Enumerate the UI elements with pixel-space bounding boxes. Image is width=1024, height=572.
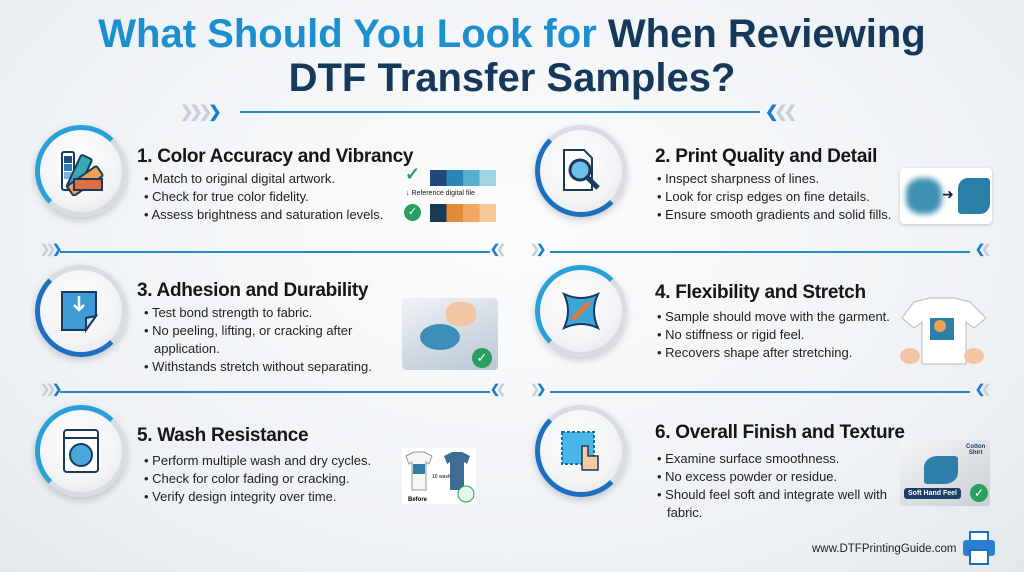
bullets bbox=[144, 305, 372, 374]
panel: adhesion bbox=[32, 265, 498, 374]
bullets: Verify design integrity over time. bbox=[152, 489, 336, 504]
row divider 1 bbox=[40, 242, 990, 256]
heading: 3. Adhesion and Durability bbox=[137, 280, 368, 301]
bullets bbox=[144, 171, 383, 222]
image: soft hand feel bbox=[900, 440, 990, 506]
bullets: Ensure smooth gradients and solid fills. bbox=[665, 207, 891, 222]
bullets: Check for true color fidelity. bbox=[152, 189, 309, 204]
bullets: Match to original digital artwork. bbox=[152, 171, 335, 186]
row divider 2: ❯❯❯ bbox=[40, 382, 58, 396]
image: peel test: ✓ bbox=[477, 350, 487, 365]
top divider: ❯❯❯❯ bbox=[180, 104, 218, 121]
image: before/after: Before bbox=[408, 497, 428, 503]
panel: flexibility bbox=[532, 265, 986, 364]
bullets: Check for color fading or cracking. bbox=[152, 471, 349, 486]
bullets: Assess brightness and saturation levels. bbox=[151, 207, 383, 222]
bullets: Withstands stretch without separating. bbox=[152, 359, 372, 374]
panel: finish and texture bbox=[532, 405, 990, 520]
title: What Should You Look for When Reviewing bbox=[98, 12, 926, 56]
panel: print quality bbox=[532, 125, 994, 226]
bullets: Should feel soft and integrate well with fabric. bbox=[665, 487, 887, 520]
bullets bbox=[144, 453, 371, 504]
row divider 2: ❯❯ bbox=[530, 382, 542, 396]
top divider bbox=[180, 104, 796, 122]
image: before/after bbox=[402, 448, 476, 504]
image: before/after: 10 wash bbox=[432, 474, 451, 480]
title: DTF Transfer Samples? bbox=[289, 56, 735, 100]
icon: washer bbox=[35, 405, 127, 497]
bullets bbox=[658, 309, 890, 360]
panel: wash resistance bbox=[32, 405, 476, 504]
bullets: Inspect sharpness of lines. bbox=[665, 171, 819, 186]
row divider 1: ❯❯❯ bbox=[40, 242, 58, 256]
row divider 1: ❮❮ bbox=[490, 242, 502, 256]
image: soft hand feel: Cotton bbox=[966, 444, 985, 450]
bullets: Perform multiple wash and dry cycles. bbox=[152, 453, 371, 468]
bullets: Look for crisp edges on fine details. bbox=[665, 189, 870, 204]
bullets: No peeling, lifting, or cracking after application. bbox=[152, 323, 352, 356]
image: blur vs sharp: ➜ bbox=[942, 186, 954, 202]
icon: magnifier bbox=[535, 125, 627, 217]
icon: peel bbox=[35, 265, 127, 357]
row divider 2: ❮❮ bbox=[490, 382, 502, 396]
heading: 1. Color Accuracy and Vibrancy bbox=[137, 146, 413, 167]
row divider 2 bbox=[40, 382, 990, 396]
row divider 2: ❮❮ bbox=[975, 382, 987, 396]
icon: swatch bbox=[35, 125, 127, 217]
image: soft hand feel: Shirt bbox=[969, 450, 982, 456]
icon: stretch bbox=[535, 265, 627, 357]
bullets: Sample should move with the garment. bbox=[665, 309, 890, 324]
image: soft hand feel: Soft Hand Feel bbox=[908, 490, 957, 497]
panel: color accuracy bbox=[32, 125, 496, 223]
bullets bbox=[658, 171, 891, 222]
title bbox=[98, 12, 926, 100]
bullets: No stiffness or rigid feel. bbox=[665, 327, 804, 342]
heading: 4. Flexibility and Stretch bbox=[655, 282, 866, 303]
bullets: Examine surface smoothness. bbox=[665, 451, 839, 466]
color comparison swatches bbox=[404, 164, 496, 222]
top divider: ❮❮❮ bbox=[765, 104, 793, 121]
image: soft hand feel: ✓ bbox=[974, 486, 984, 500]
bullets: Test bond strength to fabric. bbox=[152, 305, 312, 320]
color comparison swatches: ✓ bbox=[408, 206, 417, 218]
footer url: www.DTFPrintingGuide.com bbox=[812, 543, 956, 555]
row divider 1: ❯❯ bbox=[530, 242, 542, 256]
icon: printer bbox=[963, 531, 995, 565]
icon: fabric and hand bbox=[535, 405, 627, 497]
heading: 5. Wash Resistance bbox=[137, 425, 308, 446]
image: peel test bbox=[402, 298, 498, 370]
row divider 1: ❮❮ bbox=[975, 242, 987, 256]
color comparison swatches: ✓ bbox=[405, 164, 420, 184]
heading: 6. Overall Finish and Texture bbox=[655, 422, 905, 443]
image: blur vs sharp bbox=[900, 168, 992, 224]
color comparison swatches: ↓ Reference digital file bbox=[406, 190, 475, 197]
bullets: No excess powder or residue. bbox=[665, 469, 837, 484]
bullets: Recovers shape after stretching. bbox=[665, 345, 852, 360]
heading: 2. Print Quality and Detail bbox=[655, 146, 877, 167]
image: t-shirt bbox=[900, 298, 986, 364]
bullets bbox=[658, 451, 887, 520]
